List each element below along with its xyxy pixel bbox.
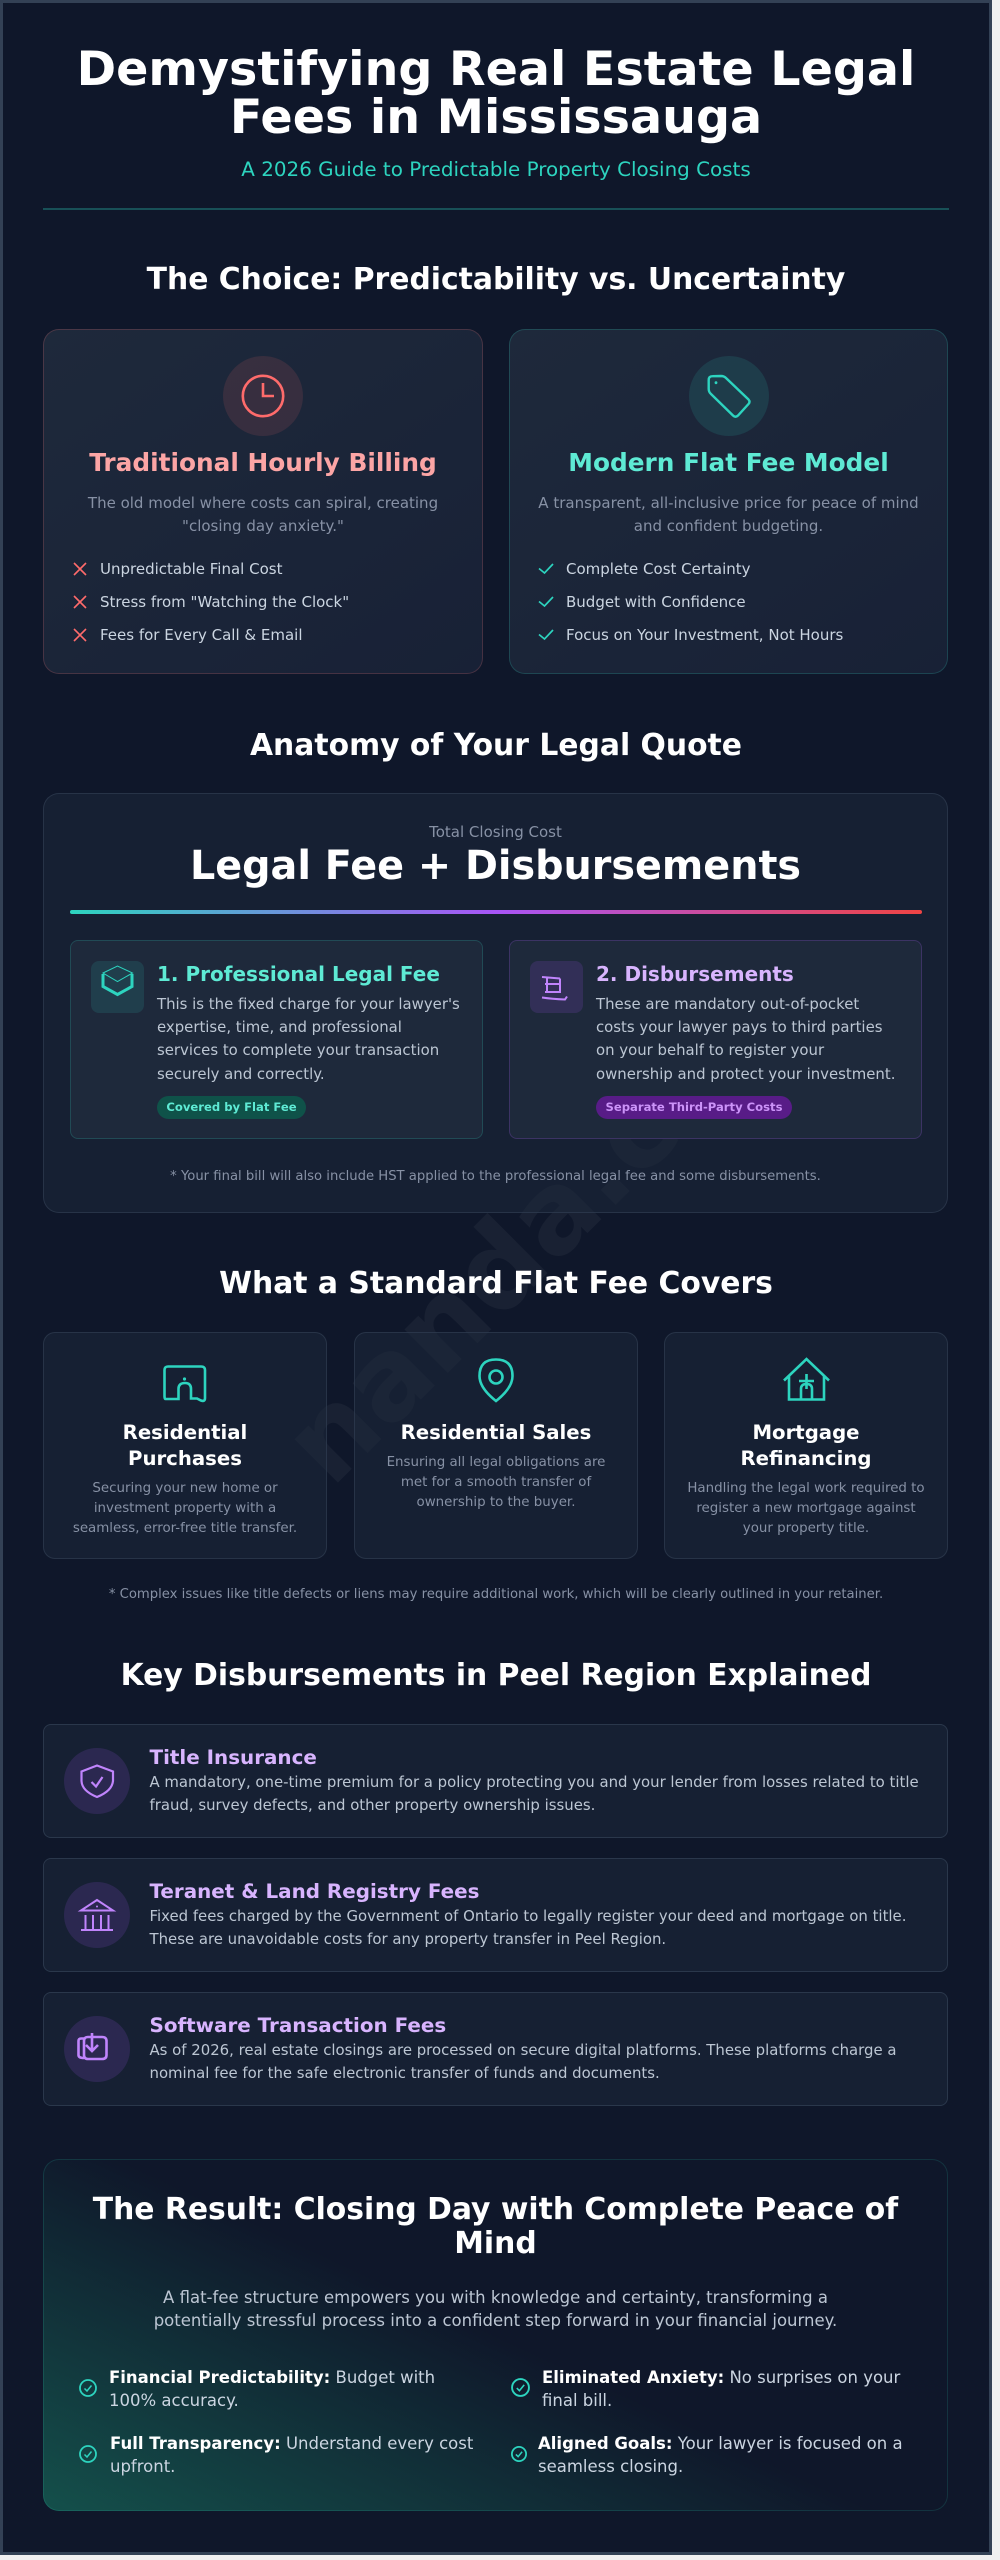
card title (123, 1420, 247, 1470)
check icon (79, 2445, 97, 2463)
card title: Refinancing (741, 1447, 871, 1470)
benefit: 100% accuracy. (109, 2390, 239, 2410)
benefit: final bill. (542, 2390, 612, 2410)
benefit: upfront. (110, 2456, 175, 2476)
card description (88, 494, 438, 535)
card title: Residential (123, 1420, 247, 1444)
pill: separate: Separate Third-Party Costs (606, 1100, 782, 1114)
panel: residential purchases (43, 1332, 327, 1559)
formula label: Total Closing Cost (429, 823, 562, 841)
card title: Modern Flat Fee Model (568, 448, 889, 477)
list item: Budget with Confidence (566, 593, 746, 611)
icon: price tag (689, 356, 769, 436)
row text: A mandatory, one-time premium for a policy protecting you and your lender from losses related to title (150, 1773, 919, 1791)
card text: your property title. (743, 1520, 869, 1536)
card title: Purchases (128, 1447, 242, 1470)
card description: A transparent, all-inclusive price for peace of mind (538, 494, 919, 512)
card text: Ensuring all legal obligations are (387, 1454, 605, 1470)
row title: Teranet & Land Registry Fees (150, 1880, 479, 1903)
icon: cube (91, 961, 144, 1013)
sub panel text: ownership and protect your investment. (596, 1065, 895, 1083)
list icon: x (74, 595, 86, 609)
icon: purchase (163, 1365, 206, 1402)
heading: key disbursements: Key Disbursements in Peel Region Explained (121, 1658, 871, 1692)
gradient bar (70, 910, 922, 914)
sub panel title: 1. Professional Legal Fee (157, 962, 440, 986)
sub panel text: on your behalf to register your (596, 1041, 824, 1059)
check icon (511, 2378, 530, 2397)
row text (150, 2041, 896, 2082)
row: teranet (43, 1858, 948, 1972)
card text: Securing your new home or (92, 1480, 278, 1496)
panel: modern flat fee model (509, 329, 948, 674)
icon: disbursement (530, 961, 583, 1013)
list item: Complete Cost Certainty (566, 560, 751, 578)
icon: house (783, 1357, 830, 1401)
card description (538, 494, 919, 535)
card text: seamless, error-free title transfer. (73, 1520, 297, 1536)
benefit (542, 2368, 900, 2410)
benefit: Full Transparency: Understand every cost (110, 2434, 473, 2452)
heading: what flat fee covers: What a Standard Flat Fee Covers (219, 1266, 773, 1300)
result text: potentially stressful process into a confident step forward in your financial journey. (154, 2311, 837, 2330)
benefit: Aligned Goals: Your lawyer is focused on a (538, 2434, 903, 2452)
row title: Title Insurance (150, 1746, 317, 1769)
sub panel: professional legal fee (70, 940, 483, 1139)
sub panel text: costs your lawyer pays to third parties (596, 1018, 882, 1036)
card description: and confident budgeting. (634, 517, 823, 535)
row text: Fixed fees charged by the Government of Ontario to legally register your deed and mortgage on title. (150, 1907, 906, 1925)
panel: anatomy of legal quote (43, 793, 948, 1213)
icon: clock (223, 356, 303, 436)
title (77, 42, 915, 144)
list item: Focus on Your Investment, Not Hours (566, 626, 843, 644)
benefit (110, 2434, 473, 2476)
row text: nominal fee for the safe electronic transfer of funds and documents. (150, 2064, 660, 2082)
formula: Legal Fee + Disbursements (190, 842, 801, 888)
icon: shield (64, 1748, 130, 1814)
pill: covered: Covered by Flat Fee (166, 1100, 297, 1114)
card description: The old model where costs can spiral, creating (88, 494, 438, 512)
sub panel text (596, 995, 895, 1083)
heading (92, 2192, 898, 2260)
icon: bank (64, 1882, 130, 1948)
list icon: check (538, 629, 554, 640)
sub panel text: expertise, time, and professional (157, 1018, 402, 1036)
sub panel text: services to complete your transaction (157, 1041, 439, 1059)
result text: A flat-fee structure empowers you with knowledge and certainty, transforming a (163, 2288, 828, 2307)
row text: These are unavoidable costs for any property transfer in Peel Region. (150, 1930, 666, 1948)
card title: Mortgage (752, 1420, 860, 1444)
card text: register a new mortgage against (696, 1500, 916, 1516)
heading: The Result: Closing Day with Complete Peace of (93, 2192, 898, 2226)
footnote: * Complex issues like title defects or liens may require additional work, which will be clearly outlined in your retainer. (109, 1587, 883, 1602)
icon: location pin (478, 1358, 514, 1402)
sub panel text: This is the fixed charge for your lawyer's (157, 995, 460, 1013)
sub panel text: These are mandatory out-of-pocket (596, 995, 859, 1013)
benefit: Eliminated Anxiety: No surprises on your (542, 2368, 900, 2386)
card text: met for a smooth transfer of (401, 1474, 591, 1490)
sub panel: disbursements (509, 940, 922, 1139)
card text (687, 1480, 925, 1536)
card text: Handling the legal work required to (687, 1480, 925, 1496)
row text: fraud, survey defects, and other property ownership issues. (150, 1796, 595, 1814)
panel: mortgage refinancing (664, 1332, 948, 1559)
card text: ownership to the buyer. (417, 1494, 575, 1510)
check icon (511, 2446, 527, 2462)
row title: Software Transaction Fees (150, 2014, 446, 2037)
benefit (109, 2368, 435, 2410)
card description: "closing day anxiety." (182, 517, 344, 535)
benefit (538, 2434, 903, 2476)
benefit: Financial Predictability: Budget with (109, 2368, 435, 2386)
icon: software transfer (64, 2016, 130, 2082)
title: Demystifying Real Estate Legal (77, 42, 915, 96)
row text (150, 1773, 919, 1814)
row: title insurance (43, 1724, 948, 1838)
list item: Fees for Every Call & Email (100, 626, 302, 644)
sub panel text (156, 995, 460, 1083)
benefit: seamless closing. (538, 2456, 683, 2476)
sub panel title: 2. Disbursements (596, 962, 794, 986)
heading: Mind (454, 2226, 537, 2260)
heading: the choice: The Choice: Predictability vs. Uncertainty (147, 262, 845, 296)
card title: Residential Sales (401, 1420, 591, 1444)
heading: anatomy: Anatomy of Your Legal Quote (250, 728, 742, 762)
card text (73, 1480, 297, 1536)
footnote: * Your final bill will also include HST applied to the professional legal fee and some disbursements. (170, 1169, 821, 1184)
list icon: check (538, 563, 554, 574)
watermark: nanda.com (258, 926, 841, 1508)
card title (741, 1420, 871, 1470)
sub panel text: securely and correctly. (157, 1065, 325, 1083)
panel: traditional hourly billing (43, 329, 483, 674)
list icon: check (538, 596, 554, 608)
title: Fees in Mississauga (230, 90, 762, 144)
check icon (79, 2379, 97, 2397)
row: software (43, 1992, 948, 2106)
list item: Unpredictable Final Cost (100, 560, 282, 578)
pill: separate (596, 1096, 792, 1119)
card text: investment property with a (94, 1500, 276, 1516)
card title: Traditional Hourly Billing (89, 448, 437, 477)
subtitle: A 2026 Guide to Predictable Property Closing Costs (241, 158, 751, 180)
row text (149, 1907, 906, 1948)
list icon: x (74, 562, 86, 576)
panel: the result (43, 2159, 948, 2511)
row text: As of 2026, real estate closings are processed on secure digital platforms. These platforms charge a (150, 2041, 896, 2059)
panel: residential sales (354, 1332, 638, 1559)
result text (154, 2288, 837, 2330)
list item: Stress from "Watching the Clock" (100, 593, 349, 611)
pill: covered (157, 1096, 306, 1119)
list icon: x (74, 628, 86, 642)
card text (387, 1454, 605, 1510)
